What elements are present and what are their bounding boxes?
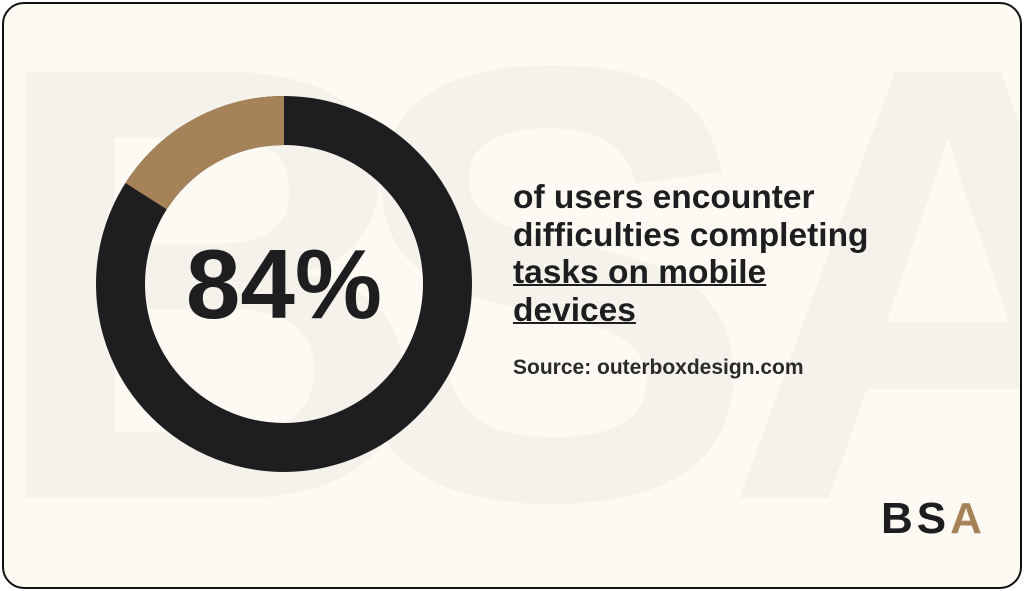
statement text: difficulties completing (513, 216, 868, 254)
statement text: devices (513, 292, 636, 328)
logo BSA: BSA (881, 494, 986, 543)
statement text (513, 179, 868, 328)
percentage: 84% (186, 229, 382, 339)
statement text: of users encounter (513, 179, 815, 216)
source: Source: outerboxdesign.com (513, 356, 804, 379)
statement text: tasks on mobile (513, 254, 766, 291)
